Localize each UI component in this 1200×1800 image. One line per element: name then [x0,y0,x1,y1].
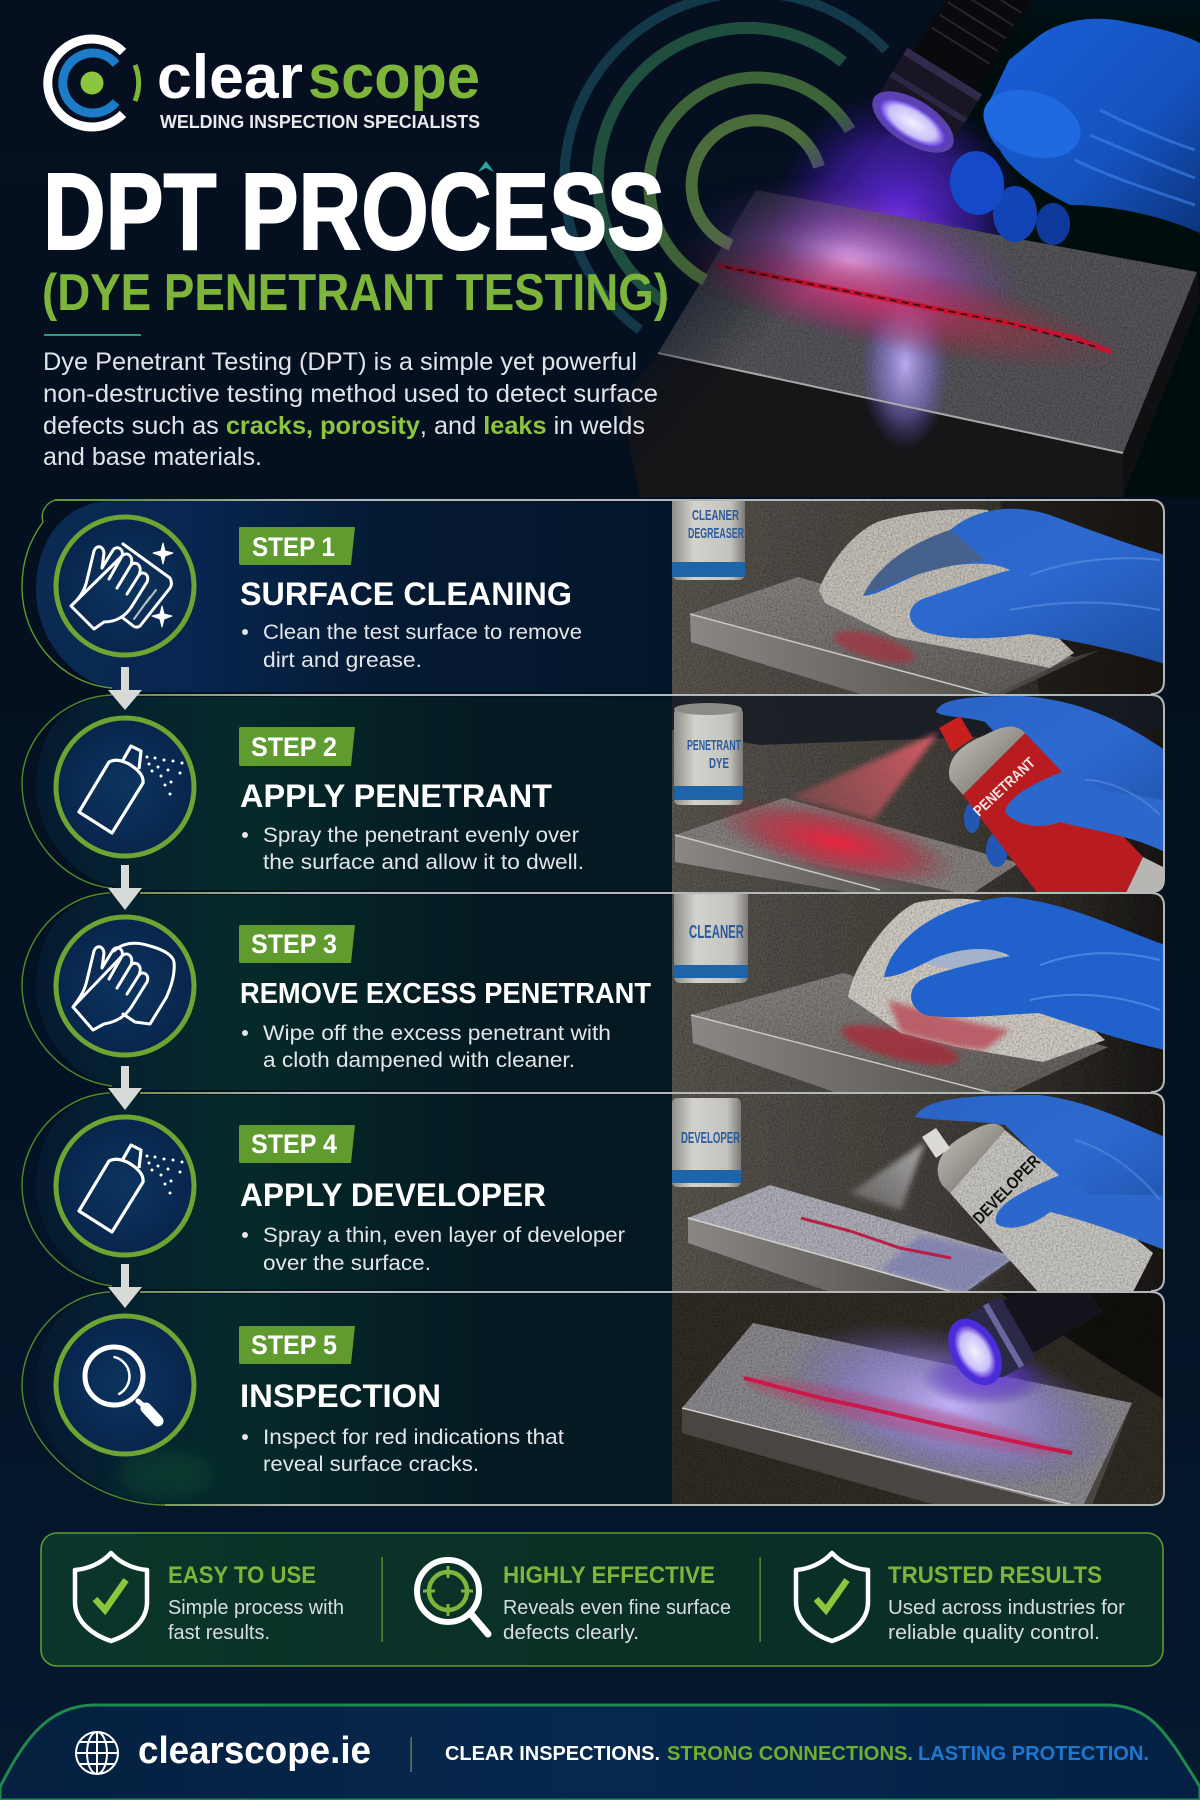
step 1 background [36,501,672,692]
cleaner can: DEGREASER [688,525,744,542]
arrow: step 2 to 3 [108,865,142,910]
icon: hand with cloth [73,943,174,1030]
tagline: STRONG CONNECTIONS. [667,1743,913,1765]
penetrant can: PENETRANT [687,737,741,754]
step 3 background [36,895,672,1090]
step 5 badge: STEP 5 [251,1330,337,1360]
cloth with red stains [848,899,1105,1062]
purple glow [782,98,1016,253]
tagline: CLEAR INSPECTIONS. [445,1743,660,1765]
step 2 background [36,697,672,890]
step 2 photo [672,696,1165,903]
steel plate [682,1291,1133,1519]
step 5 background [36,1294,672,1504]
benefit: highly effective: HIGHLY EFFECTIVE [503,1562,715,1589]
panel: step 3 [22,888,1165,1095]
panel: benefits [41,1533,1163,1666]
glove [863,509,1165,664]
step 3 heading: REMOVE EXCESS PENETRANT [240,978,651,1010]
concentric rings [564,0,886,330]
glove behind can [915,1095,1165,1250]
steel plate with developer [688,1185,1015,1294]
flashlight [872,0,1032,153]
step 5 accent curve [22,1292,165,1505]
subtitle: (DYE PENETRANT TESTING) [42,264,669,322]
step 1 outline [55,500,1164,694]
step 1 accent curve [22,500,112,688]
footer [0,1705,1200,1800]
step 2 icon [56,718,194,856]
step 2 badge [239,727,355,766]
penetrant can [674,703,743,805]
developer can [672,1098,741,1187]
thumb [996,1140,1165,1250]
step 4 body [242,1223,625,1275]
panel: step 2 [22,695,1165,903]
benefit: highly effective: Reveals even fine surface [503,1597,731,1619]
step 3 badge [239,925,355,963]
icon: magnifying glass [85,1347,158,1421]
icon: spray can [79,1145,184,1232]
steel plate [674,798,1016,892]
step 2 body: Spray the penetrant evenly over [263,823,579,847]
panel: step 1 [22,490,1165,696]
step 5 badge [239,1326,355,1364]
step 5 icon [56,1316,194,1454]
intro paragraph [43,348,658,471]
step 1 icon [56,517,194,655]
divider [760,1557,761,1642]
footer band [0,1705,1200,1800]
divider [382,1557,383,1642]
intro paragraph: Dye Penetrant Testing (DPT) is a simple yet powerful [43,348,637,376]
benefit: easy to use [75,1553,344,1644]
step 3 icon [56,917,194,1055]
penetrant can: DYE [709,755,729,772]
divider [44,334,141,336]
logo tagline: WELDING INSPECTION SPECIALISTS [160,112,480,132]
step 4 photo [672,1094,1165,1294]
divider [410,1737,412,1772]
step 4 accent curve [22,1093,112,1286]
benefits box [41,1533,1163,1666]
test plate [620,187,1200,497]
arrow: step 3 to 4 [108,1066,142,1110]
step 1 badge [239,527,355,565]
benefit: trusted results [796,1553,1125,1644]
step 3 badge: STEP 3 [251,929,337,959]
logo: clearscope: scope [308,43,480,112]
can label: PENETRANT [970,754,1039,820]
panel: step 4 [22,1093,1165,1294]
dark backdrop [945,8,1200,497]
benefit: highly effective: defects clearly. [503,1622,639,1644]
cleaner can: CLEANER [692,507,739,524]
benefit: trusted results: reliable quality control. [888,1622,1100,1644]
step 1 body: dirt and grease. [263,648,422,672]
step 5 green glow [117,1451,213,1499]
step 4 background [36,1095,672,1289]
intro paragraph: and base materials. [43,443,262,471]
red spray cone [791,732,939,820]
glove behind can [936,696,1165,867]
can label: DEVELOPER [969,1151,1044,1228]
hero glove [946,19,1200,245]
glove [884,897,1165,1050]
icon: hand wiping [71,543,173,629]
icon: shield check [75,1553,147,1641]
thumb [1005,768,1165,852]
step 2 outline [120,695,1164,892]
developer spray [850,1142,925,1210]
icon: globe [76,1732,118,1774]
logo: clearscope [48,39,480,132]
step 4 body: Spray a thin, even layer of developer [263,1223,625,1247]
step 3 body: a cloth dampened with cleaner. [263,1048,575,1072]
step 3 body [242,1021,611,1072]
title: DPT PROCESS [43,151,665,273]
title accent mark [478,161,494,172]
tagline [445,1743,1149,1765]
step 4 badge [239,1125,355,1163]
developer can: DEVELOPER [681,1130,740,1147]
icon: shield check [796,1553,868,1641]
step 2 body: the surface and allow it to dwell. [263,850,584,874]
benefit: trusted results: TRUSTED RESULTS [888,1562,1102,1589]
benefit: easy to use: Simple process with [168,1597,344,1619]
arrow: step 1 to 2 [108,667,142,710]
hero image: UV lamp on test plate [564,0,1200,540]
logo mark [48,39,139,127]
step 2 heading: APPLY PENETRANT [240,778,552,814]
cleaner can [672,501,745,580]
step 5 heading: INSPECTION [240,1378,441,1414]
step 5 body: Inspect for red indications that [263,1425,564,1449]
benefit: trusted results: Used across industries for [888,1597,1125,1619]
aerosol can [922,1124,1153,1294]
website: clearscope.ie [138,1730,371,1772]
flashlight [937,1256,1106,1395]
tagline: LASTING PROTECTION. [918,1743,1149,1765]
icon: magnifier with target [417,1560,488,1634]
logo wordmark: clear [157,43,303,112]
step 5 body: reveal surface cracks. [263,1452,479,1476]
step 5 photo [672,1256,1165,1519]
benefit: easy to use: EASY TO USE [168,1562,316,1589]
step 5 outline [140,1292,1164,1505]
step 2 badge: STEP 2 [251,732,337,762]
arrow: step 4 to 5 [108,1264,142,1308]
steel plate [690,577,1100,696]
step 1 body [242,620,582,672]
step 5 body [242,1425,564,1476]
step 4 outline [140,1093,1164,1291]
intro paragraph: defects such as cracks, porosity, and leaks in welds [43,412,645,440]
step 1 body: Clean the test surface to remove [263,620,582,644]
step 4 body: over the surface. [263,1251,431,1275]
benefit: easy to use: fast results. [168,1622,270,1644]
step 4 badge: STEP 4 [251,1129,337,1159]
step 3 body: Wipe off the excess penetrant with [263,1021,611,1045]
aerosol can [939,716,1165,895]
intro paragraph: non-destructive testing method used to detect surface [43,380,658,408]
panel: step 5 [22,1256,1165,1519]
step 3 photo [672,888,1165,1095]
cloth [819,509,1074,668]
benefit: highly effective [417,1560,731,1644]
step 1 photo [672,490,1165,696]
cleaner can: CLEANER [689,922,744,942]
step 1 badge: STEP 1 [252,532,335,562]
step 2 accent curve [22,695,112,888]
steel plate [691,973,1108,1095]
cleaner can [674,888,748,983]
step 2 body [242,823,584,874]
step 3 accent curve [22,893,112,1086]
icon: spray can [79,746,184,833]
step 3 outline [140,893,1164,1092]
step 4 heading: APPLY DEVELOPER [240,1177,546,1213]
step 1 heading: SURFACE CLEANING [240,576,572,612]
step 4 icon [56,1117,194,1255]
